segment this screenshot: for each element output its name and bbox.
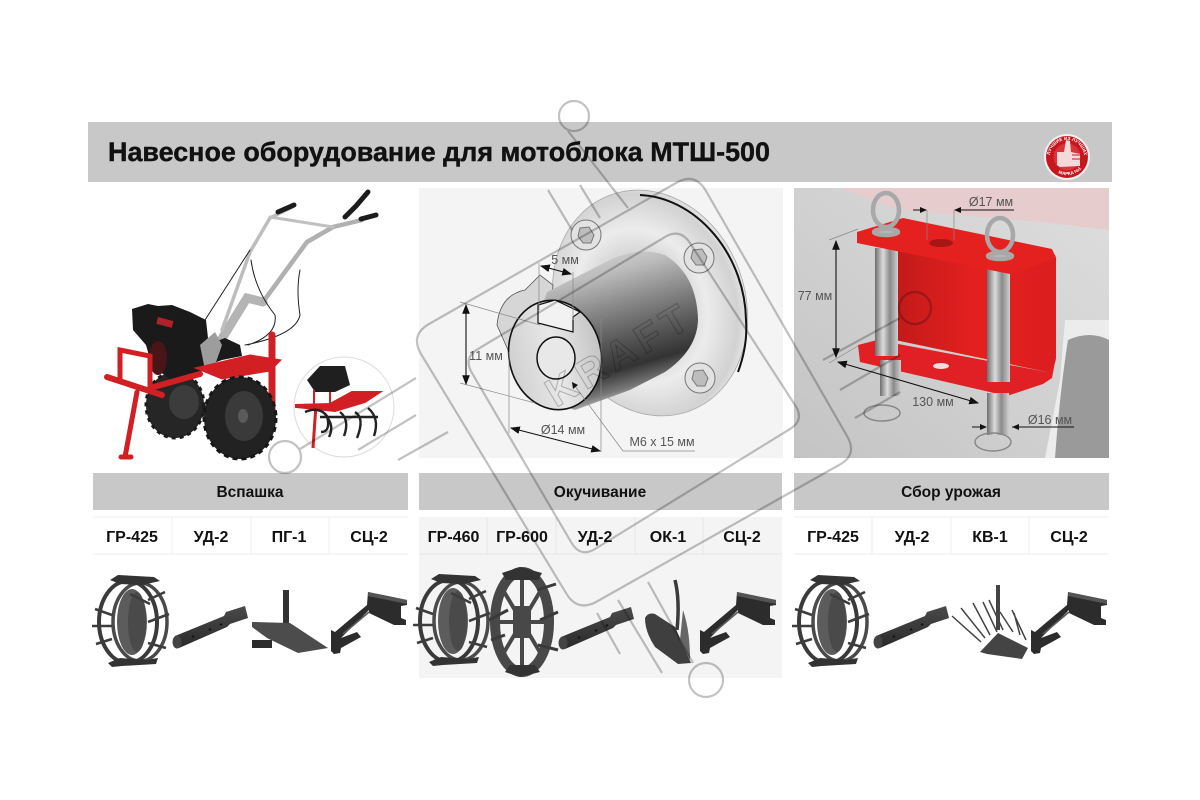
bracket back [895,240,1056,372]
panel: hitch bracket [794,188,1109,458]
heading [419,473,782,510]
watermark stamp [269,101,931,697]
dimension 77 mm: 77 мм [798,289,832,303]
labels: ГР-460 [428,529,479,546]
rear wheel [146,372,204,438]
labels: СЦ-2 [1050,529,1088,546]
labels: СЦ-2 [723,529,761,546]
engine [132,304,242,379]
labels [794,517,1108,554]
dimension M6 [572,382,695,451]
badge: quality seal [1044,134,1090,180]
dimension M6: М6 х 15 мм [629,435,695,449]
title: Навесное оборудование для мотоблока МТШ-500 [108,137,770,167]
dimension 77 mm [798,229,858,363]
pin: right [975,268,1011,451]
heading: Вспашка [216,484,284,501]
labels [93,517,408,554]
labels: УД-2 [194,529,228,546]
dimension 5 mm: 5 мм [551,253,579,267]
labels: ГР-425 [807,529,859,546]
icon: wheel GR-460 [413,574,490,666]
labels: КВ-1 [972,529,1008,546]
section: harvesting [792,473,1109,667]
dimension 17 mm [913,195,1014,240]
title bar [88,122,1112,182]
heading: Сбор урожая [901,484,1001,501]
bolts [571,220,715,393]
labels: ОК-1 [650,529,686,546]
icon: shaft [172,606,248,648]
icon: wheel [792,575,869,667]
watermark stamp: KRAFT [538,297,696,416]
icon: hitch [700,592,776,654]
icon: wheel GR-600 [489,567,558,677]
lug [497,275,553,350]
pin: left [864,248,901,421]
labels [419,517,782,554]
labels: ГР-600 [496,529,548,546]
section: hilling [413,473,782,678]
icon: hitch [331,592,407,654]
dimension 17 mm: Ø17 мм [969,195,1013,209]
dimension 130 mm: 130 мм [912,395,954,409]
background photo tones [840,188,1109,458]
labels: УД-2 [578,529,612,546]
icon: wheel [92,575,169,667]
end cap [499,292,611,418]
lower background [419,517,782,678]
front wheel [204,377,276,459]
badge: quality seal: МАРКА №1 [1058,167,1082,176]
flange disc [521,162,779,444]
icon: plow [252,590,328,653]
icon: shaft [558,607,634,650]
shaft body [530,252,698,410]
handlebars [205,192,376,345]
labels: СЦ-2 [350,529,388,546]
icon: potato digger [952,585,1028,659]
labels: ГР-425 [106,529,158,546]
dimension 14 mm [509,318,601,452]
heading [93,473,408,510]
labels: ПГ-1 [272,529,306,546]
icon: shaft [874,606,949,648]
dimension 11 mm: 11 мм [469,349,503,363]
dimension 16 mm [972,413,1074,430]
heading [794,473,1109,510]
icon: hitch [1031,592,1107,654]
bracket lower plate [858,340,1055,396]
flange rim [640,195,746,372]
eye bolts [873,193,1013,259]
labels: УД-2 [895,529,929,546]
inset: tiller [294,357,394,457]
dimension 14 mm: Ø14 мм [541,423,585,437]
red frame [107,335,281,457]
icon: hiller [645,580,691,664]
dimension 16 mm: Ø16 мм [1028,413,1072,427]
section: plowing [92,473,408,667]
dimension 130 mm [838,362,978,409]
dimension 11 mm [460,302,540,403]
dimension 5 mm [539,253,579,320]
badge: quality seal: ЛУЧШИЕ ИЗ ЛУЧШИХ [1047,136,1088,156]
bracket top plate [857,218,1056,369]
panel: PTO shaft [419,162,783,458]
panel: walk-behind tractor [107,192,394,459]
heading: Окучивание [554,484,647,501]
